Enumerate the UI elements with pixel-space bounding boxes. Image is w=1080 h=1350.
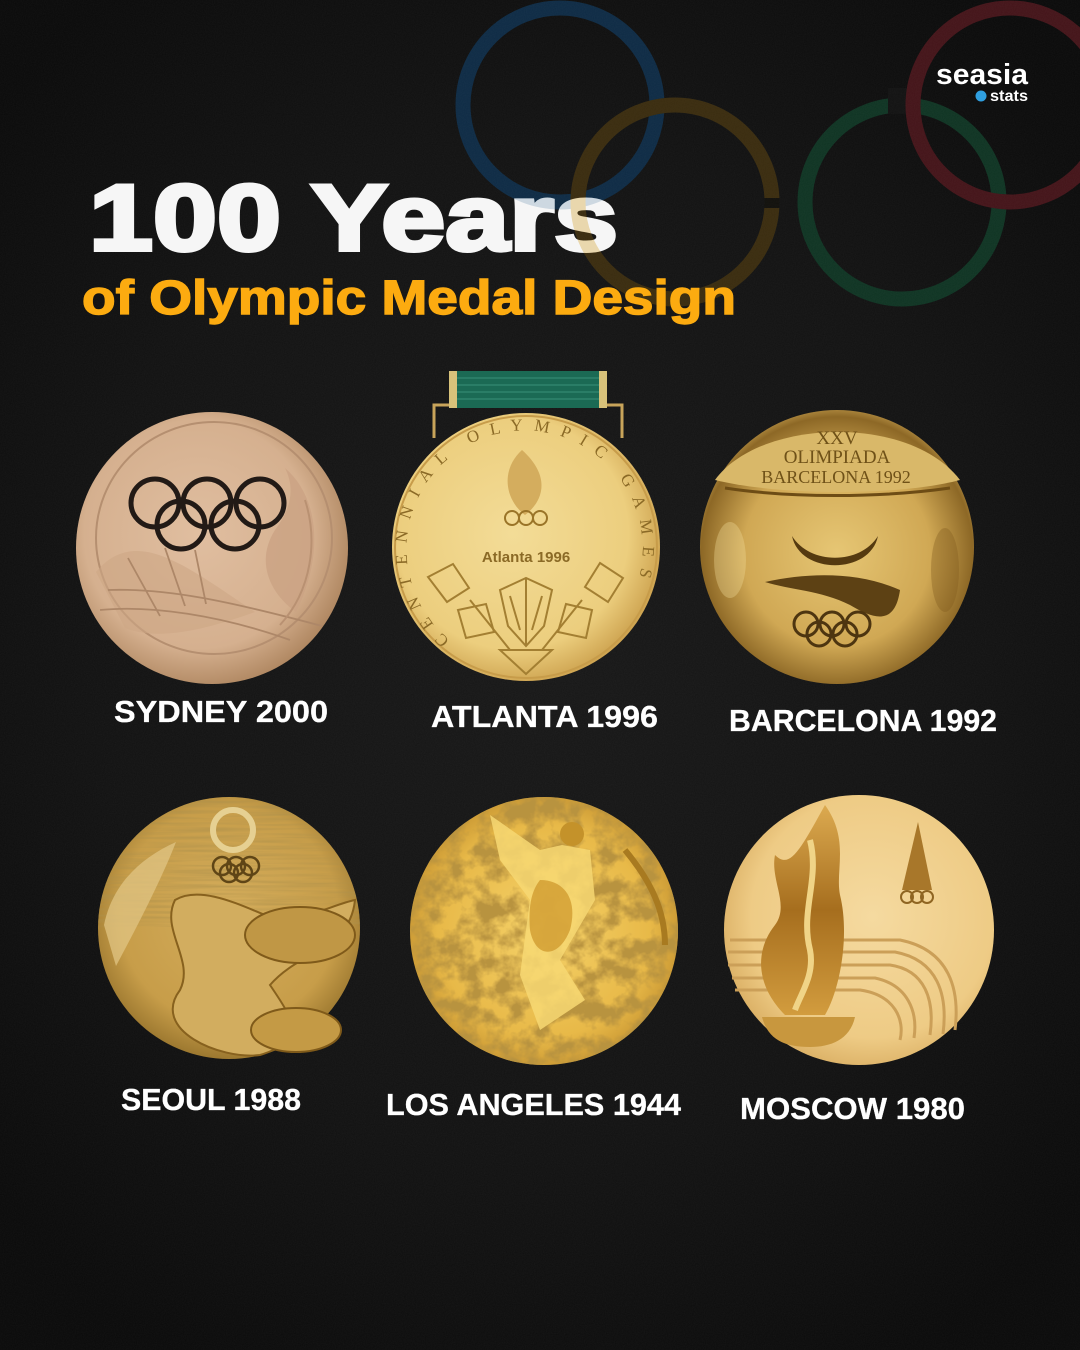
label: Barcelona 1992: BARCELONA 1992 [729, 703, 997, 738]
title: 100 Years: 100 Years [89, 165, 618, 270]
ring tint over title [463, 8, 772, 299]
label: Sydney 2000: SYDNEY 2000 [114, 694, 328, 729]
background olympic rings [463, 8, 1080, 299]
logo: seasia stats: seasia [936, 59, 1029, 91]
medal: Barcelona 1992 [700, 410, 974, 684]
medal: Barcelona 1992: XXV [816, 428, 858, 449]
logo: seasia stats: stats [990, 88, 1028, 105]
medal: Moscow 1980 [724, 795, 994, 1065]
label: Los Angeles 1944: LOS ANGELES 1944 [386, 1087, 682, 1122]
label: Moscow 1980: MOSCOW 1980 [740, 1091, 965, 1126]
medal: Atlanta 1996: Atlanta 1996 [482, 549, 570, 566]
medal: Barcelona 1992: OLIMPIADA [784, 447, 891, 468]
medal: Seoul 1988 [98, 797, 360, 1059]
label: Atlanta 1996: ATLANTA 1996 [431, 699, 658, 734]
medal: Atlanta 1996: CENTENNIAL OLYMPIC GAMES [395, 419, 654, 646]
medal: Sydney 2000 [76, 412, 348, 684]
medal: Los Angeles 1984 [410, 797, 678, 1065]
subtitle: of Olympic Medal Design: of Olympic Medal Design [82, 272, 736, 325]
logo: seasia stats [936, 59, 1029, 105]
medal: Barcelona 1992: BARCELONA 1992 [761, 467, 911, 487]
ribbon [449, 371, 607, 408]
label: Seoul 1988: SEOUL 1988 [121, 1082, 301, 1117]
